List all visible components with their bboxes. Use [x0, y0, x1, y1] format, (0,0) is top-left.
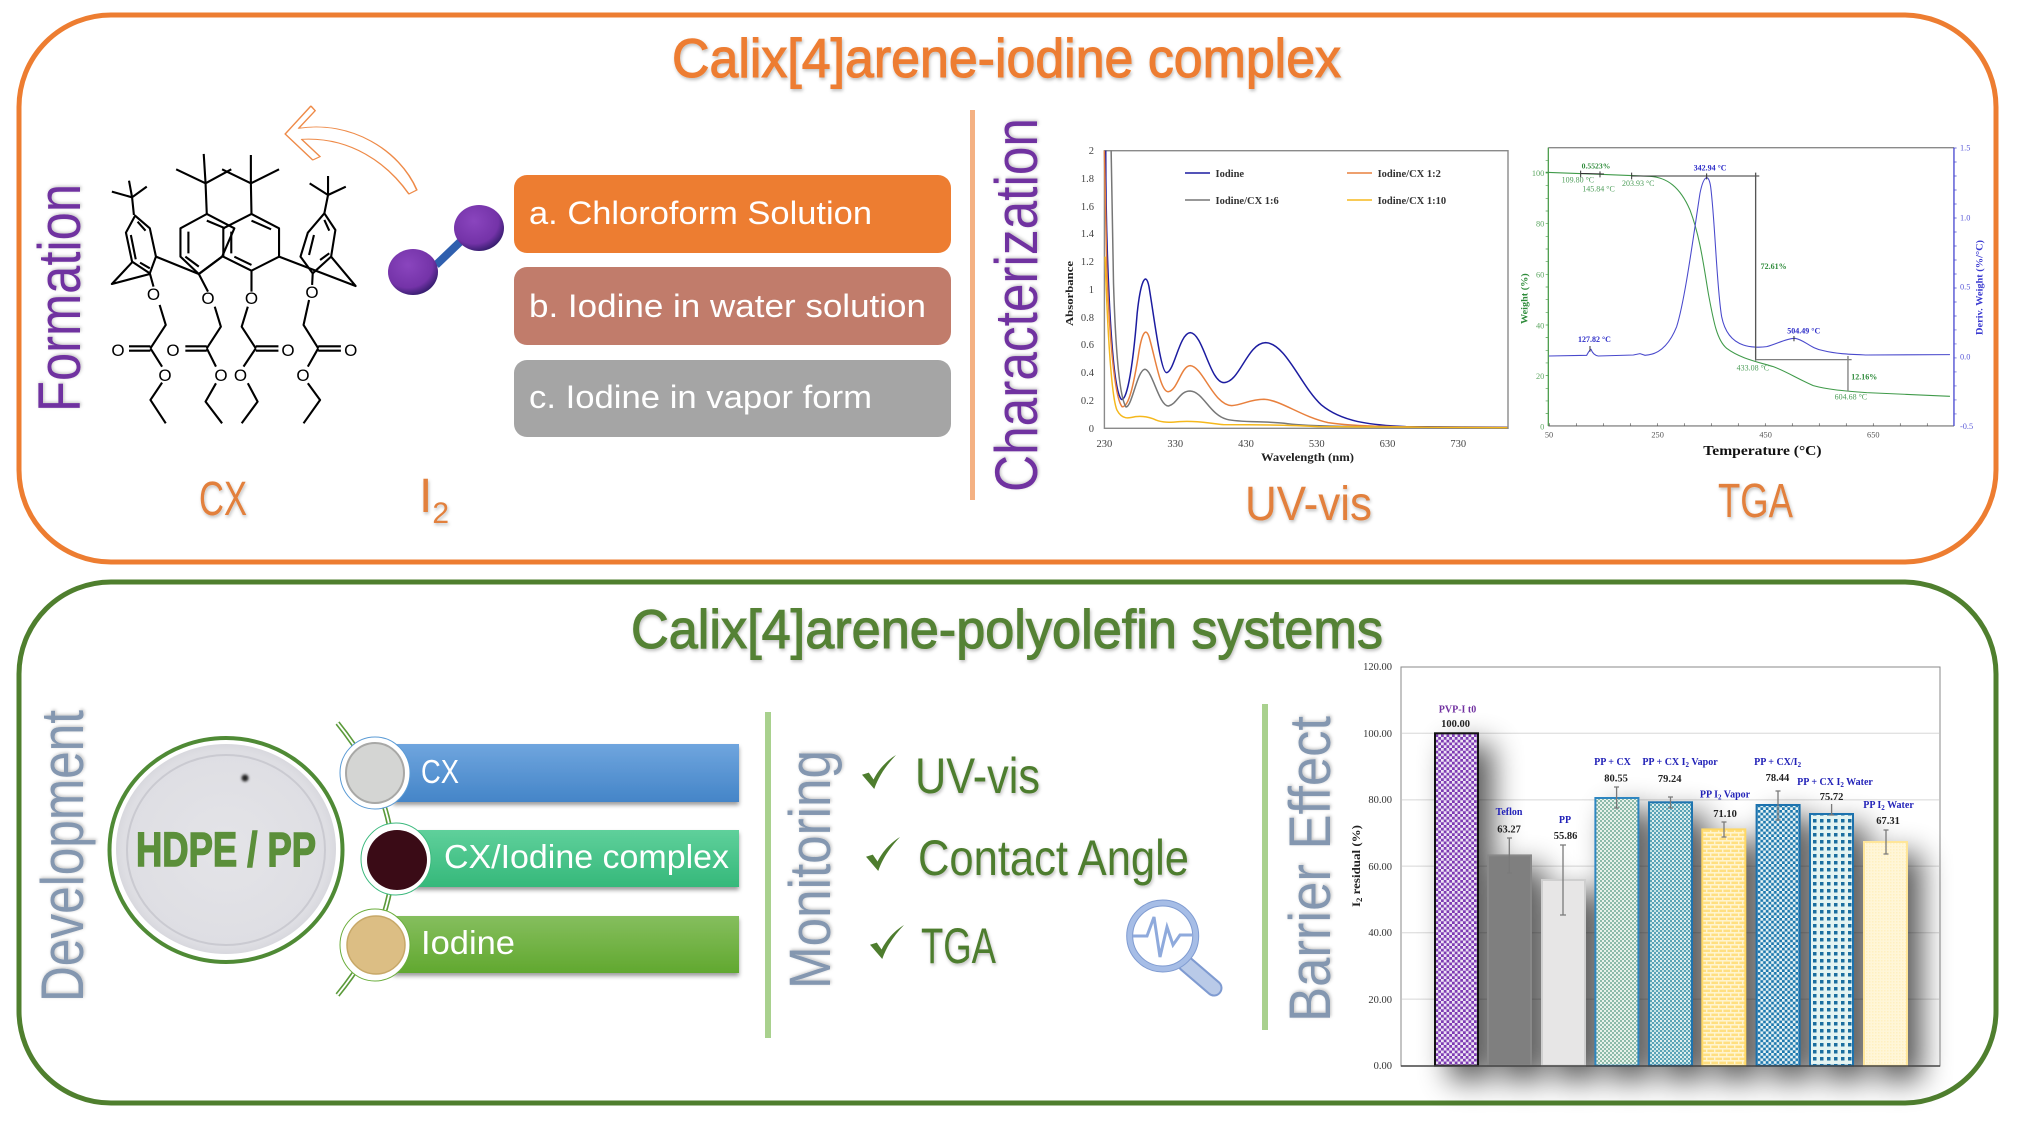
- y-axis title: weight: Weight (%): [1519, 273, 1530, 324]
- chart: TGA thermogram: [1519, 144, 1986, 459]
- y-axis ticks and labels: 1.4: [1081, 229, 1095, 240]
- bottom axis labels: 250: [1651, 430, 1664, 439]
- option: chloroform solution: a. Chloroform Solution: [529, 195, 872, 231]
- option: iodine in water solution: [514, 267, 951, 345]
- chemical structure: CX calix[4]arene: O: [201, 289, 215, 308]
- bar: CX: CX: [421, 753, 459, 790]
- y-axis ticks and labels: 0.8: [1081, 313, 1094, 324]
- value labels: 78.44: [1766, 773, 1790, 784]
- value labels: 75.72: [1820, 792, 1843, 803]
- annotations: 0.5523%: [1582, 162, 1610, 171]
- y-axis ticks and labels: 0.6: [1081, 340, 1094, 351]
- right axis labels: 1.0: [1960, 213, 1970, 222]
- chemical structure: CX calix[4]arene: O: [234, 366, 247, 385]
- bar name labels: PP + CX/I: [1754, 757, 1798, 768]
- bottom axis labels: 50: [1545, 430, 1553, 439]
- list item: UV-vis: UV-vis: [915, 748, 1040, 804]
- annotations: 12.16%: [1851, 373, 1877, 382]
- bar name labels: 2: [1840, 781, 1844, 789]
- chemical structure: CX calix[4]arene: O: [296, 366, 310, 385]
- x-axis labels: 630: [1380, 439, 1395, 450]
- y-axis ticks and labels: 0: [1089, 424, 1094, 435]
- value labels: 63.27: [1497, 825, 1521, 836]
- left axis labels: [1532, 169, 1544, 431]
- chemical structure: CX calix[4]arene: O: [245, 289, 258, 308]
- bar name labels: Teflon: [1496, 807, 1523, 818]
- option: iodine in vapor form: c. Iodine in vapor form: [529, 379, 872, 415]
- bar name labels: [1439, 705, 1914, 826]
- right axis labels: [1960, 144, 1973, 431]
- arrow: iodine into CX: [285, 106, 417, 194]
- chart: UV-vis spectra: [1064, 146, 1508, 464]
- y-axis ticks and labels: 0.2: [1081, 396, 1094, 407]
- error bars: [1507, 787, 1888, 915]
- bar name labels: 2: [1718, 794, 1722, 802]
- bar name labels: PP + CX I: [1642, 757, 1686, 768]
- curve: weight: [1546, 172, 1950, 396]
- x-axis title: Wavelength (nm): [1261, 450, 1354, 464]
- x-axis labels: 730: [1450, 439, 1466, 450]
- bar name labels: PP + CX I: [1797, 777, 1840, 788]
- legend: Iodine/CX 1:10: [1378, 196, 1446, 207]
- annotations: 433.08 °C: [1737, 364, 1769, 373]
- heading: Development: Development: [29, 710, 96, 1002]
- bar: CX/Iodine complex: [414, 830, 739, 887]
- bar name labels: Vapor: [1689, 757, 1718, 768]
- y-axis ticks and labels: 1.2: [1081, 257, 1094, 268]
- bar name labels: PP I: [1863, 800, 1881, 811]
- value labels: 71.10: [1713, 809, 1737, 820]
- y-axis title: derivative weight: Deriv. Weight (%/°C): [1975, 240, 1986, 335]
- y-axis ticks and labels: 2: [1089, 146, 1094, 157]
- x-axis labels: 230: [1097, 439, 1112, 450]
- value labels: 79.24: [1658, 774, 1682, 785]
- right axis labels: 0.0: [1960, 353, 1970, 362]
- chemical structure: CX calix[4]arene: O: [305, 283, 319, 302]
- bar name labels: PP: [1559, 815, 1571, 826]
- left axis labels: 80: [1536, 220, 1544, 229]
- y-axis labels: 40.00: [1368, 928, 1392, 939]
- chemical structure: CX calix[4]arene: O: [344, 341, 357, 360]
- bar: CX: [393, 744, 739, 802]
- bar: Iodine: [393, 916, 739, 973]
- panel: calix[4]arene-polyolefin systems: [19, 582, 1996, 1103]
- list item: TGA: [870, 918, 996, 974]
- bottom axis labels: [1545, 430, 1880, 439]
- value labels: 55.86: [1554, 831, 1577, 842]
- annotations: 203.93 °C: [1622, 179, 1654, 188]
- chemical structure: CX calix[4]arene: O: [111, 341, 125, 360]
- chemical structure: CX calix[4]arene: O: [281, 341, 295, 360]
- option: chloroform solution: [514, 175, 951, 253]
- chemical structure: CX calix[4]arene: [111, 154, 357, 423]
- left axis labels: 100: [1532, 169, 1544, 178]
- left axis labels: 0: [1540, 422, 1544, 431]
- chemical structure: CX calix[4]arene: O: [147, 285, 160, 304]
- bar name labels: PP + CX: [1594, 757, 1632, 768]
- value labels: [1441, 719, 1900, 842]
- x-axis labels: 430: [1238, 439, 1254, 450]
- x-axis labels: 530: [1309, 439, 1325, 450]
- y-axis ticks and labels: 1.8: [1081, 174, 1094, 185]
- sample disk: Iodine: [340, 909, 410, 981]
- legend: Iodine/CX 1:2: [1378, 169, 1441, 180]
- title: polyolefin systems: Calix[4]arene-polyolefin systems: [631, 598, 1383, 660]
- label: I2: I: [419, 470, 432, 523]
- bar shadows: [1449, 745, 1921, 1080]
- value labels: 80.55: [1604, 774, 1628, 785]
- icon: iodine molecule: [388, 205, 504, 295]
- y-axis ticks and labels: 0.4: [1081, 368, 1095, 379]
- left axis labels: 60: [1536, 271, 1544, 280]
- x-axis labels: 330: [1167, 439, 1183, 450]
- list item: TGA: TGA: [921, 918, 996, 974]
- sample disk: CX: [340, 737, 410, 809]
- bar name labels: PP I: [1700, 790, 1718, 801]
- bar name labels: Water: [1885, 800, 1914, 811]
- left axis labels: 20: [1536, 372, 1544, 381]
- annotations: 504.49 °C: [1787, 326, 1820, 335]
- annotations: 109.80 °C: [1562, 176, 1594, 185]
- bar name labels: PVP-I t0: [1439, 705, 1476, 716]
- y-axis labels: [1363, 662, 1392, 1072]
- sample disk: CX/Iodine complex: [361, 823, 431, 895]
- y-axis labels: 120.00: [1363, 662, 1392, 673]
- y-axis labels: 0.00: [1374, 1061, 1392, 1072]
- bar name labels: Water: [1844, 777, 1873, 788]
- bottom axis labels: 650: [1867, 430, 1880, 439]
- label: TGA: TGA: [1718, 475, 1793, 528]
- bar name labels: 2: [1798, 761, 1802, 769]
- y-axis title: Absorbance: [1064, 261, 1076, 326]
- list item: Contact Angle: Contact Angle: [918, 830, 1189, 886]
- y-axis labels: 100.00: [1363, 729, 1392, 740]
- heading: Monitoring: Monitoring: [778, 750, 843, 989]
- value labels: 100.00: [1441, 719, 1470, 730]
- legend: Iodine/CX 1:6: [1216, 196, 1279, 207]
- y-axis title: residual (%): [1349, 825, 1363, 898]
- heading: Characterization: Characterization: [983, 118, 1050, 492]
- curve: derivative weight: [1549, 178, 1950, 356]
- sample disk: HDPE / PP: [110, 738, 342, 962]
- chemical structure: CX calix[4]arene: O: [158, 366, 172, 385]
- legend: Iodine: [1216, 169, 1244, 180]
- label: UV-vis: UV-vis: [1245, 478, 1372, 531]
- bar name labels: 2: [1881, 804, 1885, 812]
- heading: Formation: Formation: [26, 184, 93, 412]
- chart: I2 residual bar chart: [1349, 662, 1940, 1080]
- bar name labels: Vapor: [1721, 790, 1751, 801]
- heading: Barrier Effect: Barrier Effect: [1278, 716, 1343, 1022]
- annotations: [1562, 162, 1877, 401]
- right axis labels: -0.5: [1960, 422, 1973, 431]
- connector arc: [338, 723, 393, 995]
- x-axis labels: [1097, 439, 1466, 450]
- y-axis labels: 80.00: [1368, 795, 1392, 806]
- sample disk: HDPE / PP: HDPE / PP: [136, 824, 316, 877]
- y-axis labels: 60.00: [1368, 862, 1392, 873]
- right axis labels: 0.5: [1960, 283, 1970, 292]
- annotations: 604.68 °C: [1835, 392, 1867, 401]
- label: I2: 2: [432, 497, 449, 530]
- annotations: 342.94 °C: [1694, 164, 1727, 173]
- title: complex: Calix[4]arene-iodine complex: [672, 27, 1341, 89]
- bars: [1435, 733, 1907, 1066]
- annotations: 72.61%: [1761, 262, 1787, 271]
- legend: [1185, 169, 1446, 207]
- y-axis ticks and labels: 1.6: [1081, 202, 1094, 213]
- y-axis title: 2: [1355, 898, 1364, 902]
- value labels: 67.31: [1876, 816, 1900, 827]
- annotations: 127.82 °C: [1578, 335, 1611, 344]
- option: iodine in water solution: b. Iodine in water solution: [529, 288, 926, 324]
- left axis labels: 40: [1536, 321, 1544, 330]
- list item: UV-vis: [862, 748, 1040, 804]
- icon: magnifier with pulse: [1127, 900, 1214, 988]
- panel: calix[4]arene-iodine complex: [19, 15, 1996, 562]
- chemical structure: CX calix[4]arene: O: [166, 341, 180, 360]
- y-axis title: I: [1349, 902, 1363, 907]
- chemical structure: CX calix[4]arene: O: [214, 366, 228, 385]
- bar: Iodine: Iodine: [421, 924, 515, 961]
- label: CX: CX: [199, 473, 247, 526]
- y-axis ticks and labels: [1081, 146, 1095, 435]
- bottom axis labels: 450: [1759, 430, 1772, 439]
- bar: CX/Iodine complex: CX/Iodine complex: [444, 838, 730, 875]
- option: iodine in vapor form: [514, 360, 951, 437]
- curve: Iodine/CX 1:10: [1105, 257, 1507, 428]
- x-axis title: Temperature (°C): [1703, 444, 1822, 459]
- y-axis labels: 20.00: [1368, 995, 1392, 1006]
- bar name labels: 2: [1686, 761, 1690, 769]
- right axis labels: 1.5: [1960, 144, 1970, 153]
- curve: Iodine/CX 1:6: [1111, 151, 1507, 428]
- plot frame: [1401, 667, 1940, 1066]
- annotations: 145.84 °C: [1582, 184, 1615, 193]
- curve: Iodine/CX 1:2: [1104, 151, 1507, 428]
- y-axis ticks and labels: 1: [1089, 285, 1094, 296]
- curve: Iodine: [1106, 151, 1507, 427]
